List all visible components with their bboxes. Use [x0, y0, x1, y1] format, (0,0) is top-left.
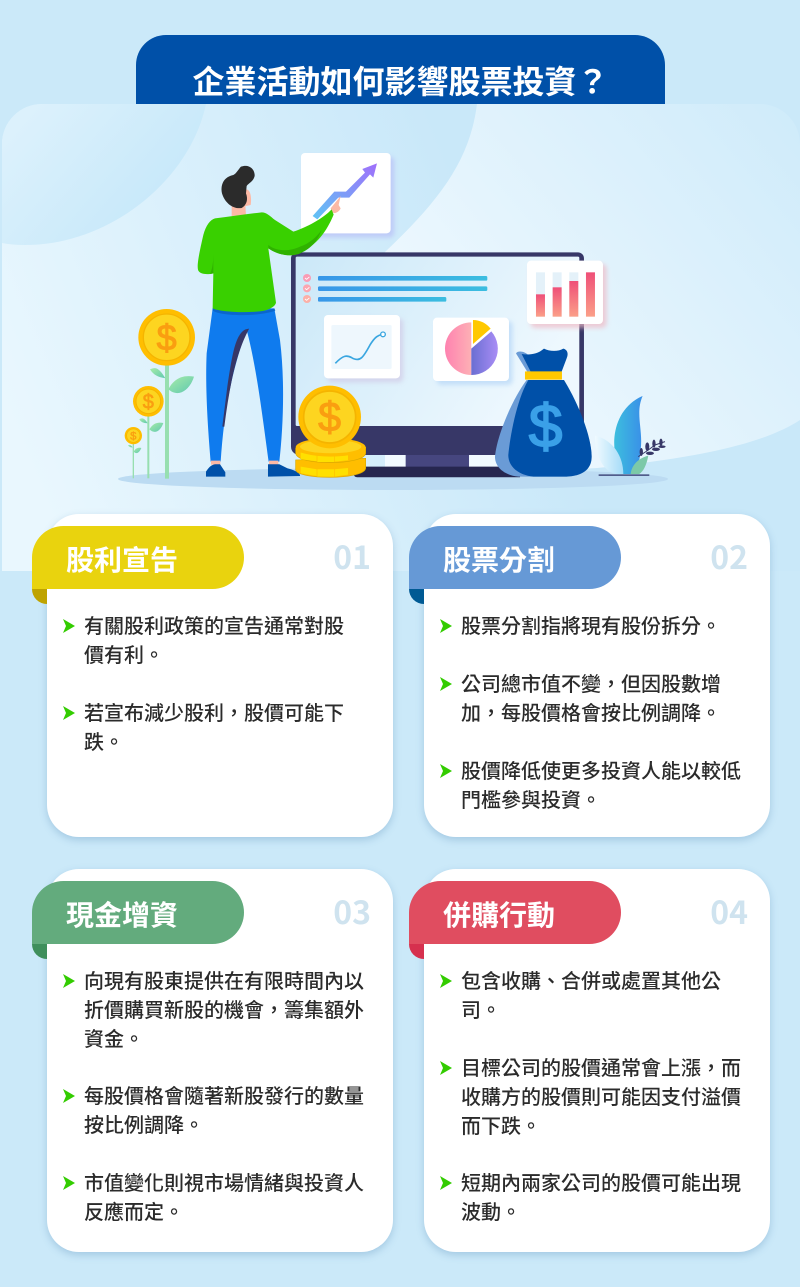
- text 01-2: [63, 697, 344, 755]
- text 03-1: 向現有股東提供在有限時間內以: [84, 965, 364, 994]
- text 02-2: 加，每股價格會按比例調降。: [461, 697, 721, 726]
- text 03-3: 市值變化則視市場情緒與投資人: [84, 1167, 364, 1196]
- heading tab 03: 現金增資: [66, 894, 178, 934]
- fold 04: [409, 929, 424, 959]
- text 03-2: 每股價格會隨著新股發行的數量: [84, 1080, 364, 1109]
- panel background: [2, 104, 800, 571]
- text 04-1: [440, 965, 721, 1023]
- plants with coins: $: [130, 431, 137, 443]
- text 02-2: [440, 668, 721, 726]
- text 03-2: 按比例調降。: [84, 1109, 204, 1138]
- heading tab 02: 股票分割: [443, 539, 555, 579]
- heading tab 04: [409, 881, 621, 944]
- card 03: 現金增資: [47, 869, 393, 1252]
- fold 02: [409, 574, 424, 604]
- text 04-2: 而下跌。: [461, 1110, 541, 1139]
- text 01-1: 價有利。: [84, 639, 164, 668]
- coin stack: [296, 386, 366, 477]
- plants with coins: $: [157, 317, 177, 358]
- text 04-3: 波動。: [461, 1196, 521, 1225]
- heading tab 02: [409, 526, 621, 589]
- text 02-3: 門檻參與投資。: [461, 784, 601, 813]
- number 04: 04: [710, 888, 748, 934]
- title banner: 企業活動如何影響股票投資？: [192, 57, 608, 103]
- plants with coins: [125, 309, 195, 479]
- title banner: [136, 35, 665, 104]
- text 01-2: 若宣布減少股利，股價可能下: [84, 697, 344, 726]
- monitor: [291, 252, 607, 477]
- text 04-3: 短期內兩家公司的股價可能出現: [461, 1167, 741, 1196]
- heading tab 04: 併購行動: [443, 894, 555, 934]
- text 04-2: 目標公司的股價通常會上漲，而: [461, 1052, 741, 1081]
- money bag: [495, 349, 592, 477]
- ground shadow: [118, 468, 668, 490]
- text 03-3: 反應而定。: [84, 1196, 184, 1225]
- decorative leaves: [595, 396, 666, 476]
- text 01-1: [63, 610, 344, 668]
- text 03-1: 折價購買新股的機會，籌集額外: [84, 994, 364, 1023]
- fold 01: [32, 574, 47, 604]
- line chart card: [324, 315, 403, 382]
- bar chart card: [527, 261, 607, 328]
- text 03-1: 資金。: [84, 1023, 144, 1052]
- plants with coins: $: [143, 391, 154, 413]
- text 03-1: [63, 965, 364, 1052]
- heading tab 01: 股利宣告: [66, 539, 178, 579]
- number 03: 03: [333, 888, 371, 934]
- text 02-2: 公司總市值不變，但因股數增: [461, 668, 721, 697]
- person pointing at chart: [198, 166, 341, 477]
- text lines on screen: [303, 274, 487, 303]
- text 02-1: 股票分割指將現有股份拆分。: [461, 610, 721, 639]
- text 03-2: [63, 1080, 364, 1138]
- text 04-2: 收購方的股價則可能因支付溢價: [461, 1081, 741, 1110]
- money bag: $: [529, 392, 563, 460]
- card 01: 股利宣告: [47, 514, 393, 837]
- text 02-3: [440, 755, 741, 813]
- number 02: 02: [710, 533, 748, 579]
- coin stack: $: [318, 394, 341, 440]
- text 04-1: 司。: [461, 994, 501, 1023]
- text 04-1: 包含收購、合併或處置其他公: [461, 965, 721, 994]
- arrow chart card: [301, 153, 394, 238]
- text 04-3: [440, 1167, 741, 1225]
- heading tab 03: [32, 881, 244, 944]
- heading tab 01: [32, 526, 244, 589]
- card 04: 併購行動: [424, 869, 770, 1252]
- text 01-1: 有關股利政策的宣告通常對股: [84, 610, 344, 639]
- card 02: 股票分割: [424, 514, 770, 837]
- pie chart card: [433, 318, 513, 385]
- text 02-3: 股價降低使更多投資人能以較低: [461, 755, 741, 784]
- text 01-2: 跌。: [84, 726, 124, 755]
- text 04-2: [440, 1052, 741, 1139]
- number 01: 01: [333, 533, 371, 579]
- fold 03: [32, 929, 47, 959]
- text 03-3: [63, 1167, 364, 1225]
- illustration panel: [2, 104, 800, 571]
